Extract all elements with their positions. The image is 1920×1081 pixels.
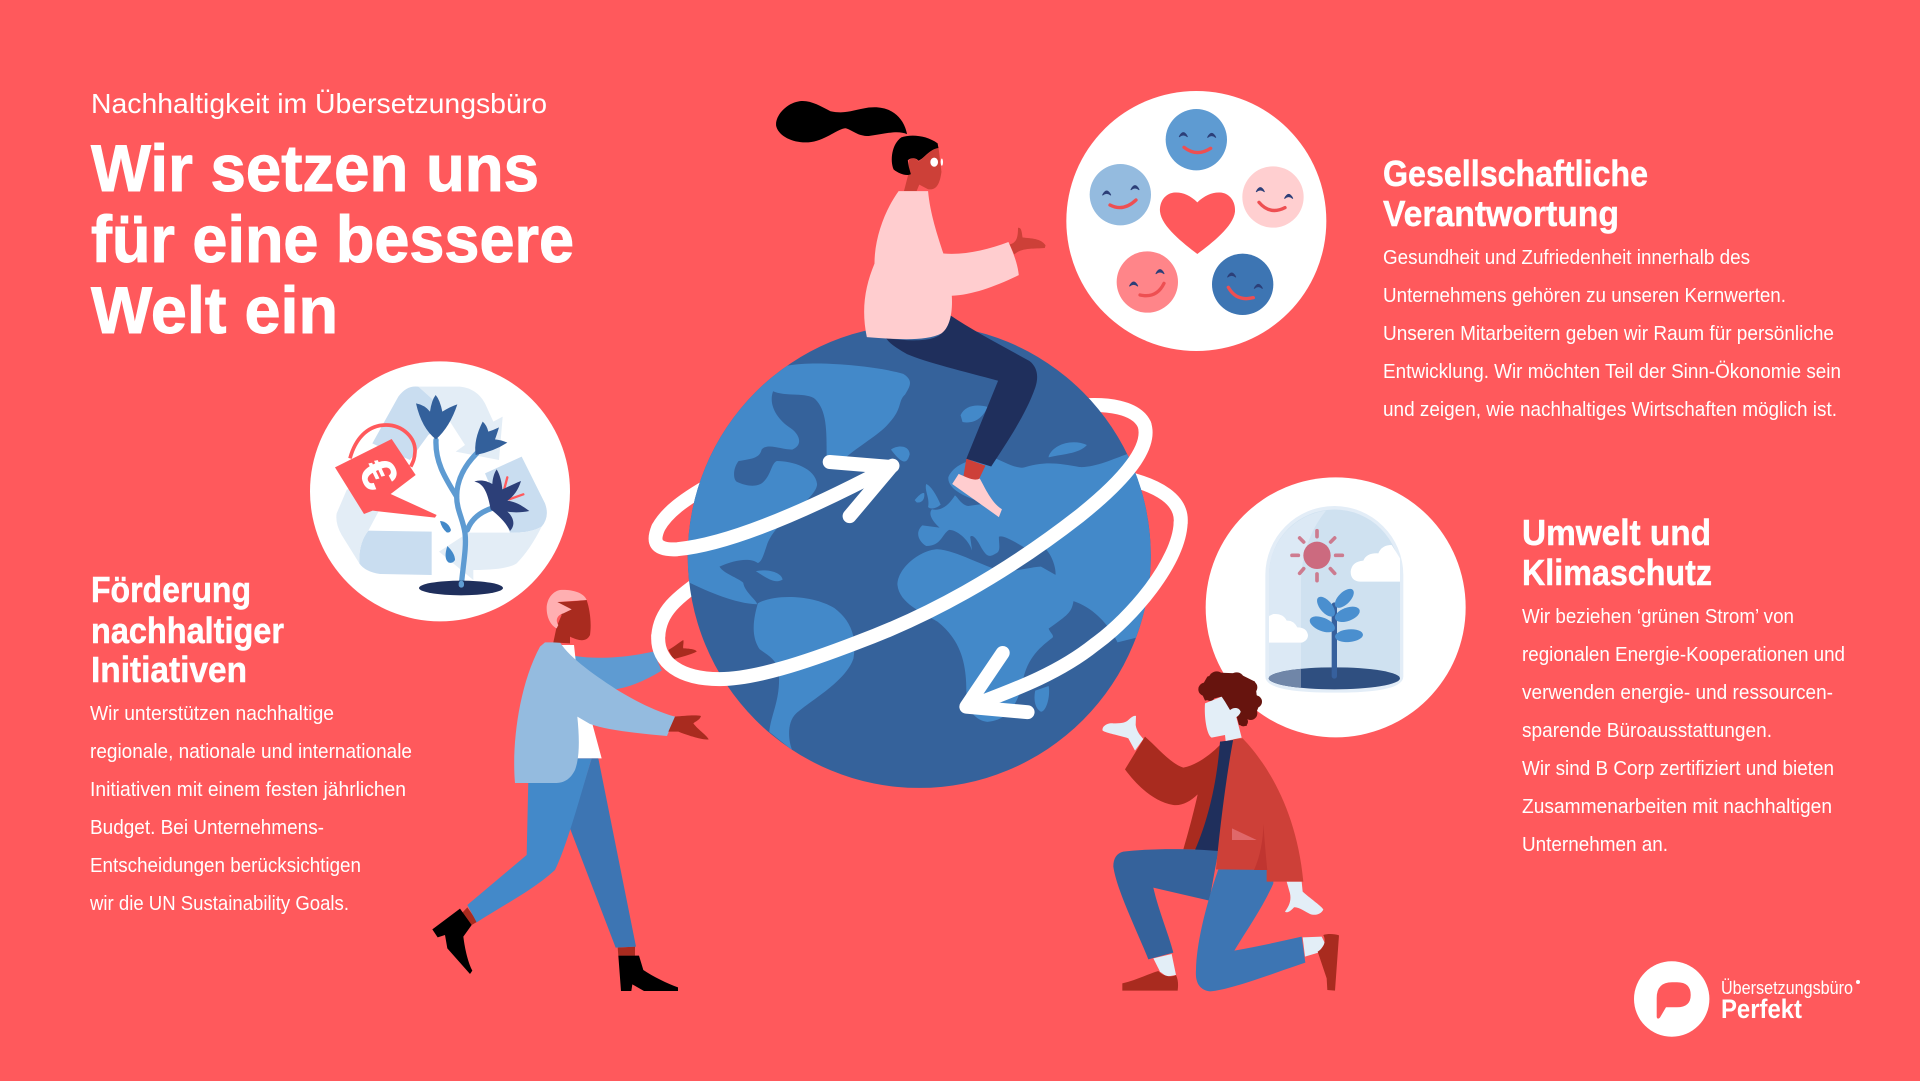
heading: Förderung nachhaltiger Initiativen xyxy=(91,569,284,690)
body text: environment: Wir sind B Corp zertifiziert und bieten xyxy=(1522,757,1834,780)
circular arrows in front of globe xyxy=(656,424,1181,712)
body text: environment xyxy=(1522,605,1845,856)
globe with rings and seated woman xyxy=(656,101,1181,788)
heading: Förderung nachhaltiger Initiativen: nachhaltiger xyxy=(91,610,284,651)
heading: Umwelt und Klimaschutz xyxy=(1522,512,1712,593)
logo: Übersetzungsbüro Perfekt xyxy=(1634,961,1860,1037)
logo wordmark: Perfekt xyxy=(1721,994,1802,1024)
watering can xyxy=(335,425,437,518)
title: für eine bessere xyxy=(91,202,574,276)
heading: Umwelt und Klimaschutz: Klimaschutz xyxy=(1522,552,1712,593)
heading: Umwelt und Klimaschutz: Umwelt und xyxy=(1522,512,1711,553)
body text: environment: regionalen Energie-Kooperationen und xyxy=(1522,643,1845,666)
soil xyxy=(1269,667,1400,689)
title xyxy=(91,131,574,347)
body text: social responsibility: Unseren Mitarbeitern geben wir Raum für persönliche xyxy=(1383,322,1834,345)
clouds xyxy=(1351,545,1400,582)
body text: environment: verwenden energie- und ressourcen- xyxy=(1522,681,1833,704)
title: Wir setzen uns xyxy=(91,131,539,205)
body text: initiatives: regionale, nationale und internationale xyxy=(90,740,412,763)
body text: social responsibility: Gesundheit und Zufriedenheit innerhalb des xyxy=(1383,246,1750,269)
logo mark xyxy=(1634,961,1709,1037)
plant xyxy=(416,395,529,595)
body text: social responsibility: Entwicklung. Wir möchten Teil der Sinn-Ökonomie sein xyxy=(1383,360,1841,383)
watering can: € xyxy=(347,449,410,498)
logo wordmark xyxy=(1721,978,1860,1024)
globe xyxy=(658,324,1163,788)
body text: initiatives: wir die UN Sustainability Goals. xyxy=(89,892,349,915)
sun xyxy=(1292,531,1342,581)
heading: Gesellschaftliche Verantwortung xyxy=(1383,153,1648,234)
body text: social responsibility xyxy=(1383,246,1841,421)
body text: initiatives: Budget. Bei Unternehmens- xyxy=(90,816,324,839)
icon: recycling plant and watering can xyxy=(310,361,570,621)
logo wordmark: Übersetzungsbüro xyxy=(1721,978,1853,998)
man walking on the left xyxy=(432,590,709,991)
body text: environment: Wir beziehen ‘grünen Strom’ von xyxy=(1522,605,1794,628)
kicker line: Nachhaltigkeit im Übersetzungsbüro xyxy=(91,88,547,119)
panel: environment text xyxy=(1522,512,1845,856)
title: Welt ein xyxy=(91,273,338,347)
heading: Förderung nachhaltiger Initiativen: Förderung xyxy=(91,569,251,610)
seedling xyxy=(1307,586,1363,676)
rings behind globe xyxy=(658,405,1181,636)
body text: environment: sparende Büroausstattungen. xyxy=(1522,719,1772,742)
heading: Förderung nachhaltiger Initiativen: Initiativen xyxy=(91,649,247,690)
heading: Gesellschaftliche Verantwortung: Verantwortung xyxy=(1383,193,1619,234)
body text: environment: Zusammenarbeiten mit nachhaltigen xyxy=(1522,795,1832,818)
heading: Gesellschaftliche Verantwortung: Gesellschaftliche xyxy=(1383,153,1648,194)
body text: initiatives: Initiativen mit einem festen jährlichen xyxy=(90,778,406,801)
body text: social responsibility: und zeigen, wie nachhaltiges Wirtschaften möglich ist. xyxy=(1383,398,1837,421)
man kneeling on the right xyxy=(1103,671,1339,991)
icon: plant under glass dome xyxy=(1206,477,1466,737)
body text: social responsibility: Unternehmens gehören zu unseren Kernwerten. xyxy=(1383,284,1786,307)
seated woman xyxy=(776,101,1046,517)
recycling symbol xyxy=(336,386,547,580)
body text: initiatives xyxy=(89,702,412,915)
panel: sustainable initiatives text xyxy=(89,569,412,915)
icon: smiling faces and heart xyxy=(1066,91,1326,351)
body text: initiatives: Wir unterstützen nachhaltige xyxy=(90,702,334,725)
body text: environment: Unternehmen an. xyxy=(1522,833,1668,856)
body text: initiatives: Entscheidungen berücksichtigen xyxy=(90,854,361,877)
panel: social responsibility text xyxy=(1383,153,1841,421)
